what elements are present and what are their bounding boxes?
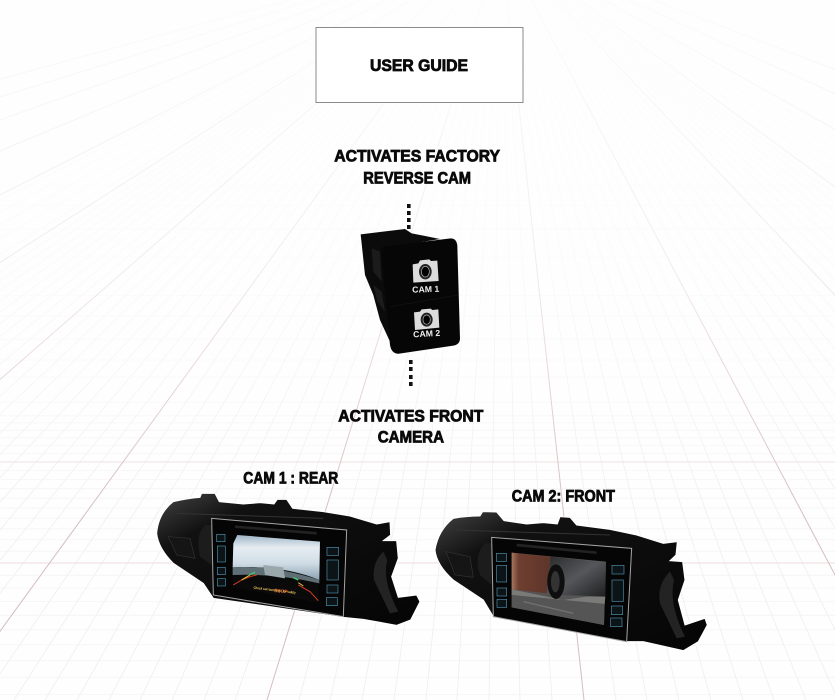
screen bezel	[492, 537, 632, 642]
heading: activates factory reverse cam: ACTIVATES FACTORY	[334, 148, 500, 166]
camera image: rear view: Check surroundings for safety	[253, 586, 296, 595]
camera image: rear view	[233, 535, 320, 603]
screen buttons	[496, 553, 624, 627]
label: cam 2 front: CAM 2: FRONT	[512, 488, 615, 506]
screen bezel	[212, 518, 347, 617]
heading: activates front camera	[338, 408, 483, 446]
camera image: rear view: STOP	[274, 588, 288, 595]
icon: cam switch	[361, 229, 460, 354]
label: cam 2: CAM 2	[413, 328, 441, 339]
dashboard unit: rear camera view	[157, 493, 420, 625]
heading: activates factory reverse cam	[334, 148, 500, 187]
dashboard unit: front camera view	[435, 512, 707, 651]
camera image: front view	[512, 553, 606, 625]
label: cam 1 rear: CAM 1 : REAR	[243, 469, 338, 487]
heading: activates front camera: ACTIVATES FRONT	[338, 408, 483, 426]
icon: camera 1	[413, 259, 439, 283]
icon: camera 2	[414, 309, 439, 330]
heading: activates front camera: CAMERA	[378, 428, 444, 446]
dotted connector: top	[407, 204, 411, 229]
dotted connector: bottom	[409, 360, 413, 386]
title box: user guide	[316, 28, 523, 102]
screen buttons	[217, 534, 339, 606]
label: cam 1: CAM 1	[412, 284, 440, 295]
title box: user guide: USER GUIDE	[370, 57, 468, 75]
heading: activates factory reverse cam: REVERSE CAM	[363, 169, 471, 187]
